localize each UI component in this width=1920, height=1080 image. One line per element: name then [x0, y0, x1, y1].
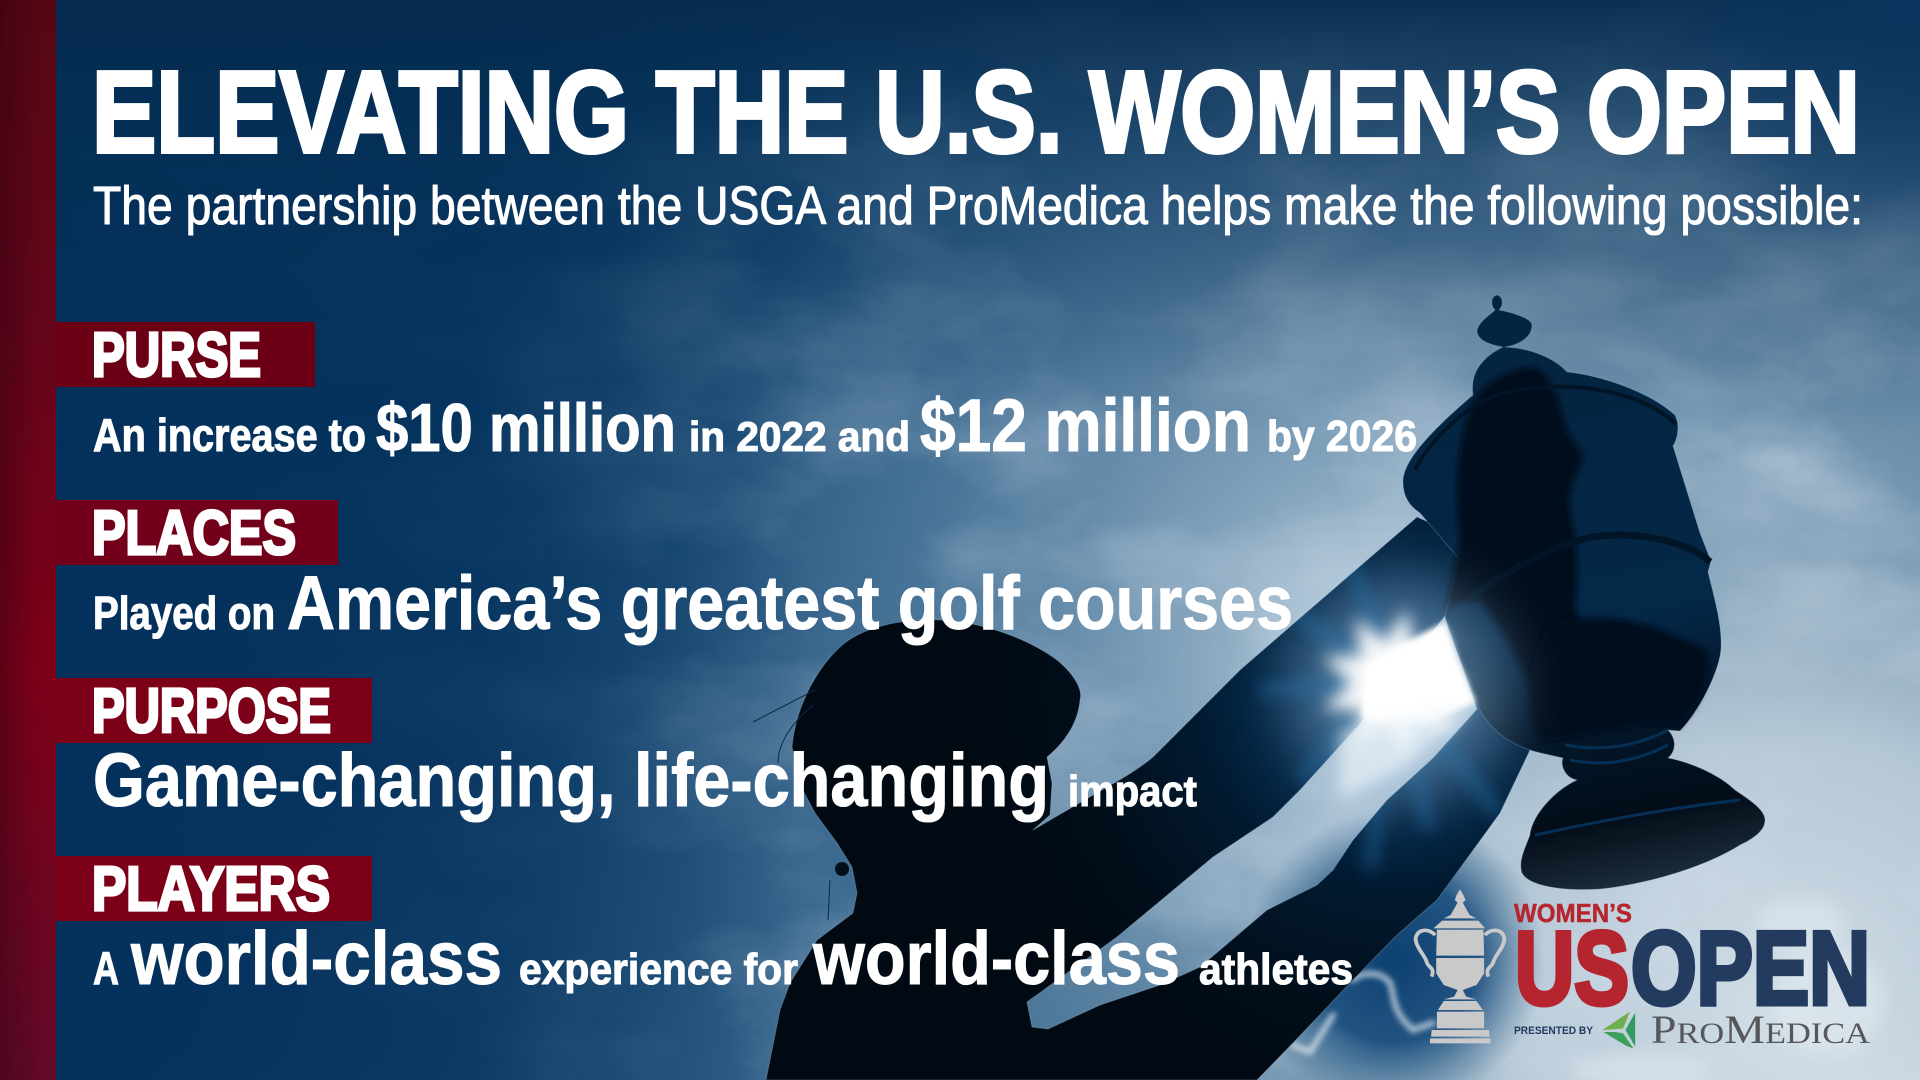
- panel: players: world-class: [812, 916, 1180, 1000]
- panel: players: A: [93, 942, 119, 994]
- panel: purse: PURSE: [92, 321, 261, 390]
- panel: purse: $10 million: [376, 390, 676, 466]
- panel: purpose: PURPOSE: [92, 677, 331, 746]
- logo: Women's US Open presented by ProMedica: [1416, 889, 1870, 1052]
- panel: purpose: [56, 677, 1197, 822]
- panel: purse: [56, 321, 1417, 467]
- panel: players: athletes: [1199, 945, 1353, 994]
- panel: purse: by 2026: [1267, 412, 1417, 461]
- panel: places: Played on: [93, 587, 275, 639]
- left red strip: [0, 0, 56, 1080]
- presented by: PRESENTED BY: [1514, 1025, 1594, 1037]
- trophy silhouette: [1403, 295, 1765, 890]
- panel: purse: An increase to: [93, 409, 366, 461]
- panel: places: America’s greatest golf courses: [287, 561, 1293, 646]
- wordmark: OPEN: OPEN: [1631, 911, 1870, 1027]
- wordmark: ProMedica: PROMEDICA: [1651, 1007, 1870, 1052]
- panel: purpose: impact: [1068, 767, 1197, 816]
- wordmark: US: US: [1515, 911, 1629, 1027]
- panel: players: PLAYERS: [92, 855, 330, 924]
- panel: places: [56, 499, 1293, 646]
- panel: players: world-class: [130, 916, 502, 1000]
- panel: purse: in 2022 and: [689, 413, 910, 460]
- panel: purpose: Game-changing, life-changing: [93, 738, 1049, 822]
- icon: ProMedica leaf: [1602, 1012, 1635, 1048]
- panel: players: experience for: [519, 945, 798, 994]
- wordmark: Women's: WOMEN’S: [1514, 898, 1632, 928]
- icon: trophy emblem: [1416, 889, 1504, 1043]
- golfer silhouette with raised arms: [753, 517, 1530, 1080]
- panel: purse: $12 million: [920, 384, 1251, 467]
- panel: players: [56, 855, 1353, 1000]
- sun flare behind trophy: [1260, 560, 1510, 870]
- panel: places: PLACES: [92, 499, 296, 568]
